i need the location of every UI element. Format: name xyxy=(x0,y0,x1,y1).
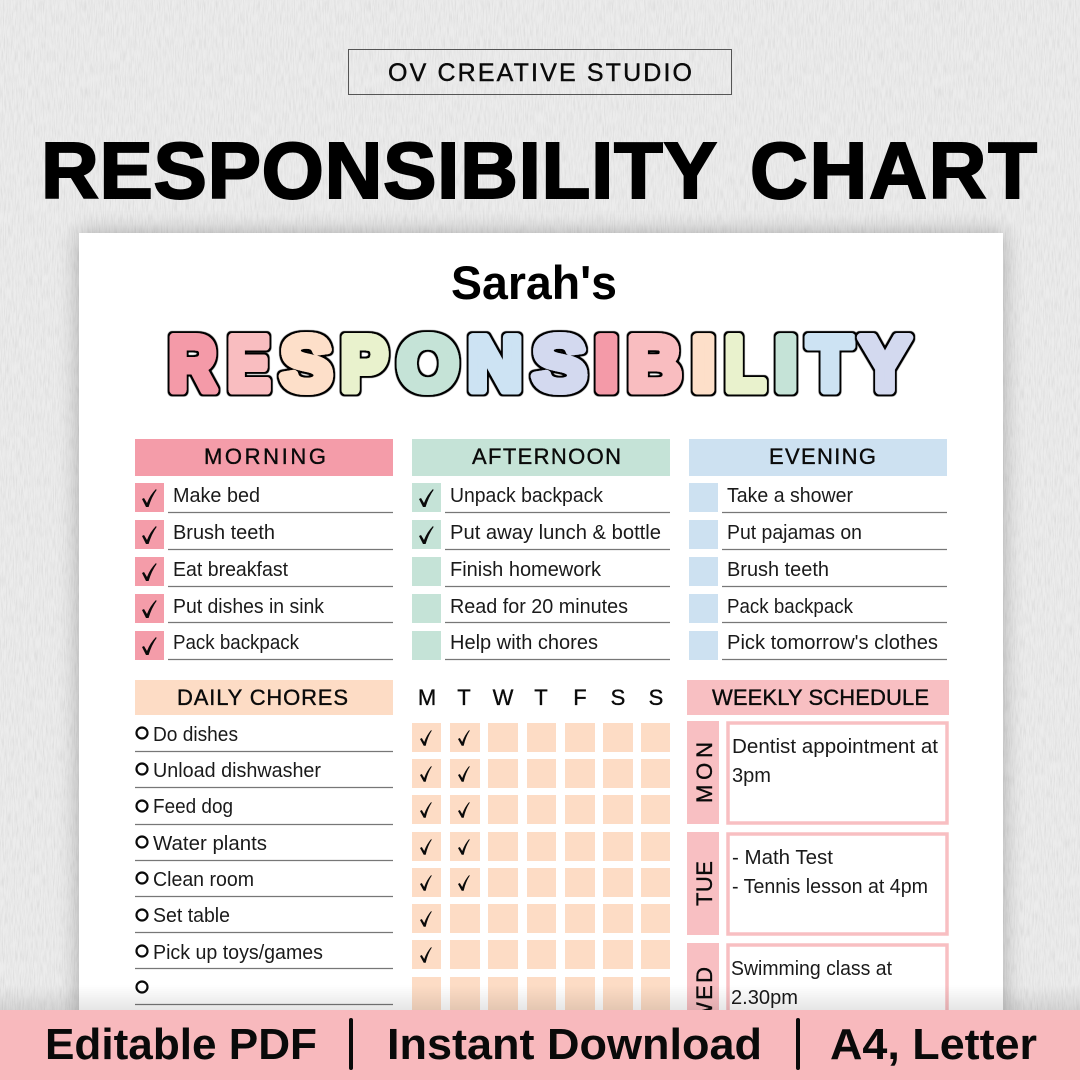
bubble word: RESPONSIBILITY: P xyxy=(341,322,387,407)
panel: daily chores list: Water plants xyxy=(153,833,267,855)
tuesday block xyxy=(687,832,947,935)
panel: morning: MORNING xyxy=(204,444,326,469)
panel: morning: Eat breakfast xyxy=(173,559,288,581)
bubble word: RESPONSIBILITY: O xyxy=(398,322,458,407)
bubble word: RESPONSIBILITY: I xyxy=(692,322,715,407)
wednesday block: WED xyxy=(692,967,717,1023)
bubble word: RESPONSIBILITY: S xyxy=(281,322,332,407)
panel: daily chores list: Pick up toys/games xyxy=(153,942,323,964)
bottom banner: A4, Letter xyxy=(830,1020,1037,1069)
panel: daily chores list: Do dishes xyxy=(153,724,238,746)
panel: afternoon: Help with chores xyxy=(450,632,598,654)
weekday tracker grid: F xyxy=(573,685,587,710)
wednesday block: Swimming class at xyxy=(731,958,892,980)
weekday tracker grid: T xyxy=(457,685,471,710)
panel: daily chores list: DAILY CHORES xyxy=(177,685,348,710)
weekday tracker grid: S xyxy=(611,685,625,710)
panel: weekly schedule: WEEKLY SCHEDULE xyxy=(712,685,929,710)
page shadow xyxy=(79,233,1003,1023)
wednesday block: 2.30pm xyxy=(731,987,798,1009)
panel: evening: Put pajamas on xyxy=(727,522,862,544)
panel: afternoon: AFTERNOON xyxy=(472,444,621,469)
panel: afternoon: Finish homework xyxy=(450,559,602,581)
studio name box: OV CREATIVE STUDIO xyxy=(388,59,692,87)
tuesday block: - Math Test xyxy=(732,847,833,869)
panel: evening: Brush teeth xyxy=(727,559,829,581)
bottom banner: Instant Download xyxy=(387,1020,762,1069)
monday block xyxy=(687,721,947,824)
panel: daily chores list: Set table xyxy=(153,905,230,927)
tuesday block: TUE xyxy=(692,861,717,906)
panel: morning: Brush teeth xyxy=(173,522,275,544)
shadow fade above bottom band xyxy=(0,985,1080,1010)
wednesday block xyxy=(687,943,947,1023)
panel: daily chores list: Clean room xyxy=(153,869,254,891)
tuesday block: - Tennis lesson at 4pm xyxy=(732,876,928,898)
panel: evening: Pack backpack xyxy=(727,596,854,618)
panel: daily chores list: Unload dishwasher xyxy=(153,760,321,782)
bubble word: RESPONSIBILITY: I xyxy=(775,322,797,407)
paper sheet xyxy=(79,233,1003,1023)
panel: morning: Make bed xyxy=(173,485,260,507)
panel: afternoon: Read for 20 minutes xyxy=(450,596,628,618)
bubble word: RESPONSIBILITY: I xyxy=(595,322,618,407)
panel: evening: Take a shower xyxy=(727,485,853,507)
panel: daily chores list: Feed dog xyxy=(153,796,233,818)
bubble word: RESPONSIBILITY: N xyxy=(468,322,522,407)
bottom banner xyxy=(0,1010,1080,1080)
main title: CHART xyxy=(750,126,1037,215)
weekday tracker grid: W xyxy=(493,685,514,710)
bubble word: RESPONSIBILITY: L xyxy=(725,322,765,407)
studio name box xyxy=(348,50,732,94)
monday block: 3pm xyxy=(732,765,771,787)
main title xyxy=(41,126,1037,215)
panel: daily chores list xyxy=(135,680,393,1004)
panel: evening: EVENING xyxy=(769,444,876,469)
panel: evening: Pick tomorrow's clothes xyxy=(727,632,938,654)
weekday tracker grid: S xyxy=(649,685,663,710)
bubble word: RESPONSIBILITY: T xyxy=(808,322,852,407)
bubble word: RESPONSIBILITY xyxy=(169,322,910,407)
monday block: Dentist appointment at xyxy=(732,736,938,758)
panel: morning: Put dishes in sink xyxy=(173,596,325,618)
name heading: Sarah's xyxy=(451,256,617,309)
weekday tracker grid: M xyxy=(418,685,436,710)
main title: RESPONSIBILITY xyxy=(41,126,717,215)
bubble word: RESPONSIBILITY: Y xyxy=(860,322,910,407)
panel: weekly schedule xyxy=(687,680,949,1023)
weekday tracker grid: T xyxy=(534,685,548,710)
bubble word: RESPONSIBILITY: S xyxy=(533,322,586,407)
monday block: MON xyxy=(692,742,717,803)
bubble word: RESPONSIBILITY: R xyxy=(169,322,216,407)
panel: afternoon xyxy=(412,439,670,660)
bubble word: RESPONSIBILITY: B xyxy=(628,322,681,407)
panel: morning: Pack backpack xyxy=(173,632,300,654)
panel: evening xyxy=(689,439,947,660)
weekday tracker grid xyxy=(412,685,670,1010)
panel: afternoon: Unpack backpack xyxy=(450,485,604,507)
bubble word: RESPONSIBILITY: E xyxy=(228,322,270,407)
bottom banner: Editable PDF xyxy=(45,1020,317,1069)
panel: morning xyxy=(135,439,393,660)
panel: afternoon: Put away lunch & bottle xyxy=(450,522,661,544)
